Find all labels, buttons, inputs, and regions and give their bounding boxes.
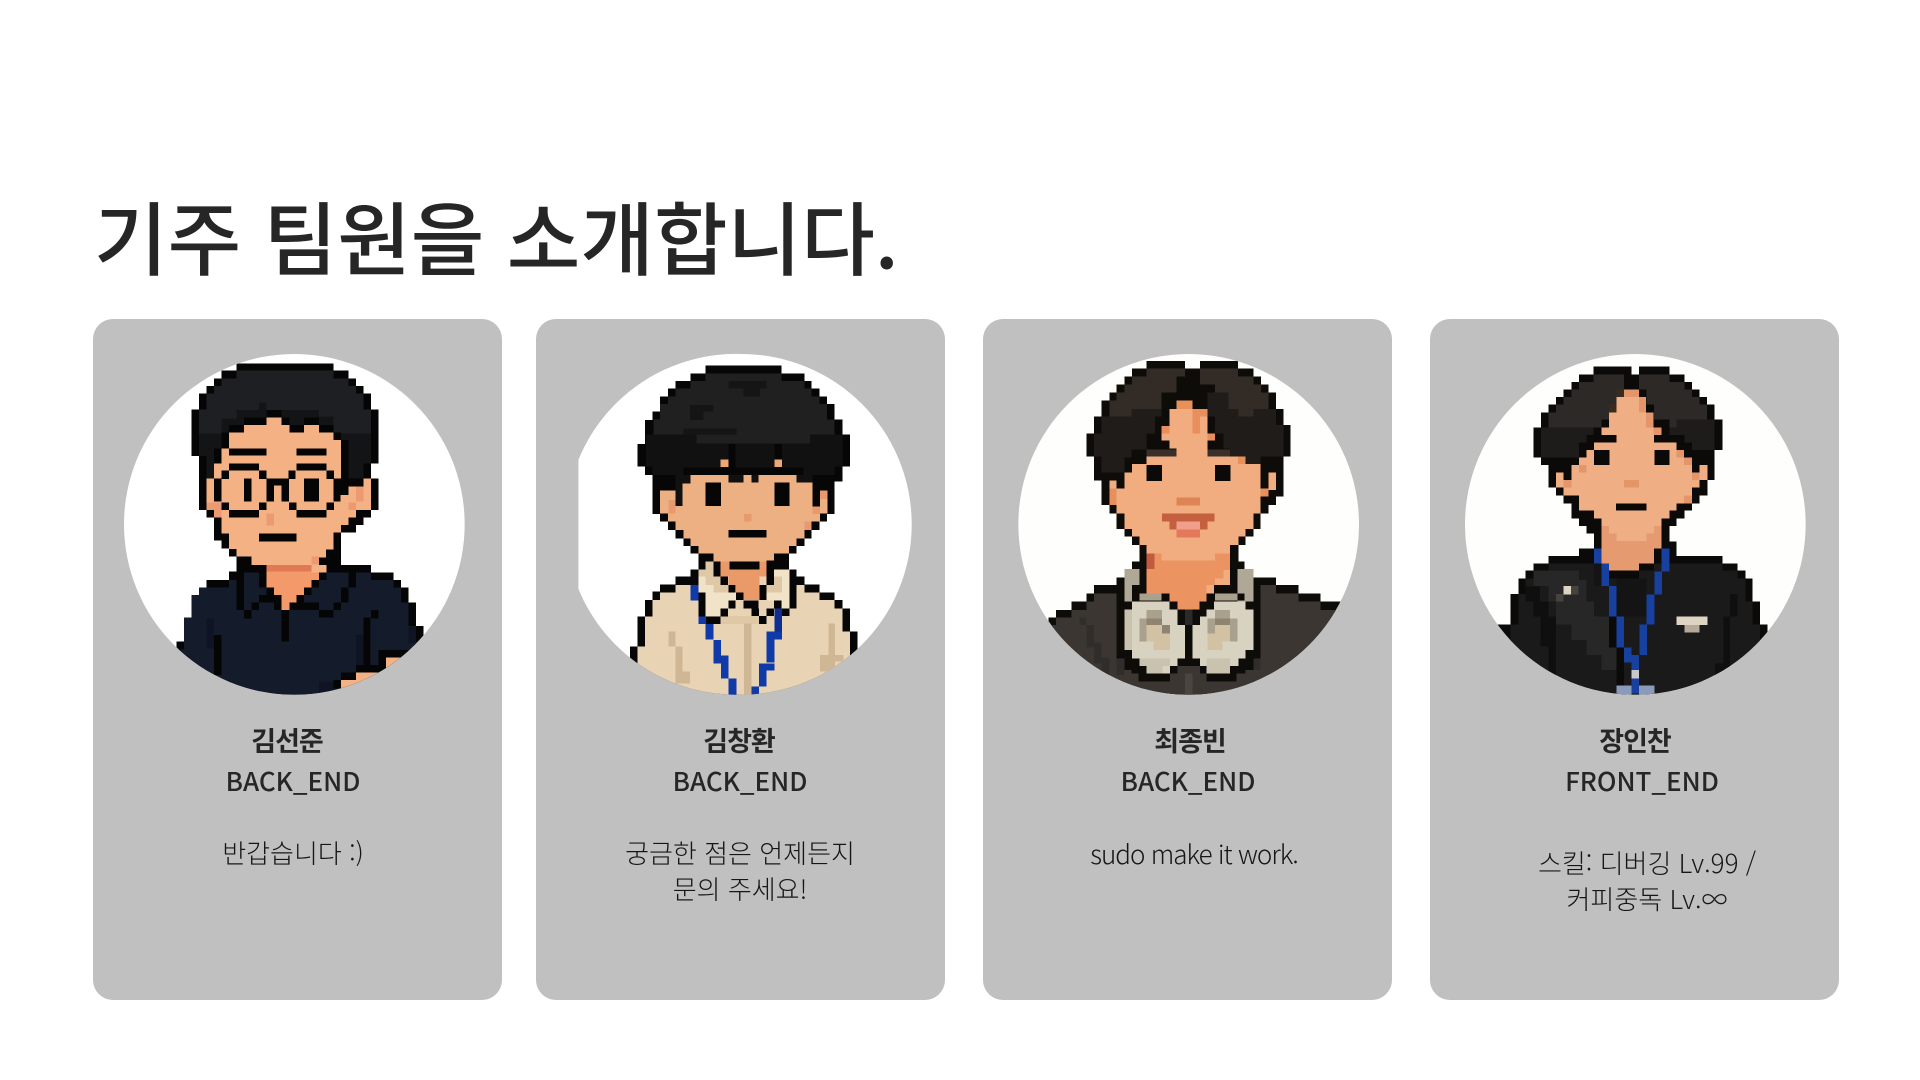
panel: 최종빈 card [983,319,1392,1000]
description: 반갑습니다 :) [222,834,364,871]
name: 장인찬 [1599,720,1671,759]
panel: 장인찬 card: 커피중독 Lv.∞ [1567,880,1727,917]
role: BACK_END [226,762,360,799]
description: 궁금한 점은 언제든지 [625,834,855,871]
title: 기주 팀원을 소개합니다. [94,177,899,293]
name: 최종빈 [1154,720,1226,759]
panel: 김창환 card [536,319,945,1000]
role: BACK_END [673,762,807,799]
icon: 김창환 pixel avatar [578,354,912,695]
name: 김창환 [703,720,775,759]
panel: 장인찬 card [1430,319,1839,1000]
role: BACK_END [1121,762,1255,799]
panel: 김선준 card [93,319,502,1000]
description [625,834,855,907]
description: sudo make it work. [1090,835,1298,872]
panel: 김창환 card: 문의 주세요! [673,870,807,907]
icon: 김선준 pixel avatar [124,354,465,695]
icon: 장인찬 pixel avatar [1465,354,1806,695]
description: 스킬: 디버깅 Lv.99 / [1538,844,1756,881]
name: 김선준 [251,720,323,759]
role: FRONT_END [1565,762,1719,799]
description [1538,844,1756,917]
icon: 최종빈 pixel avatar [1018,354,1359,695]
